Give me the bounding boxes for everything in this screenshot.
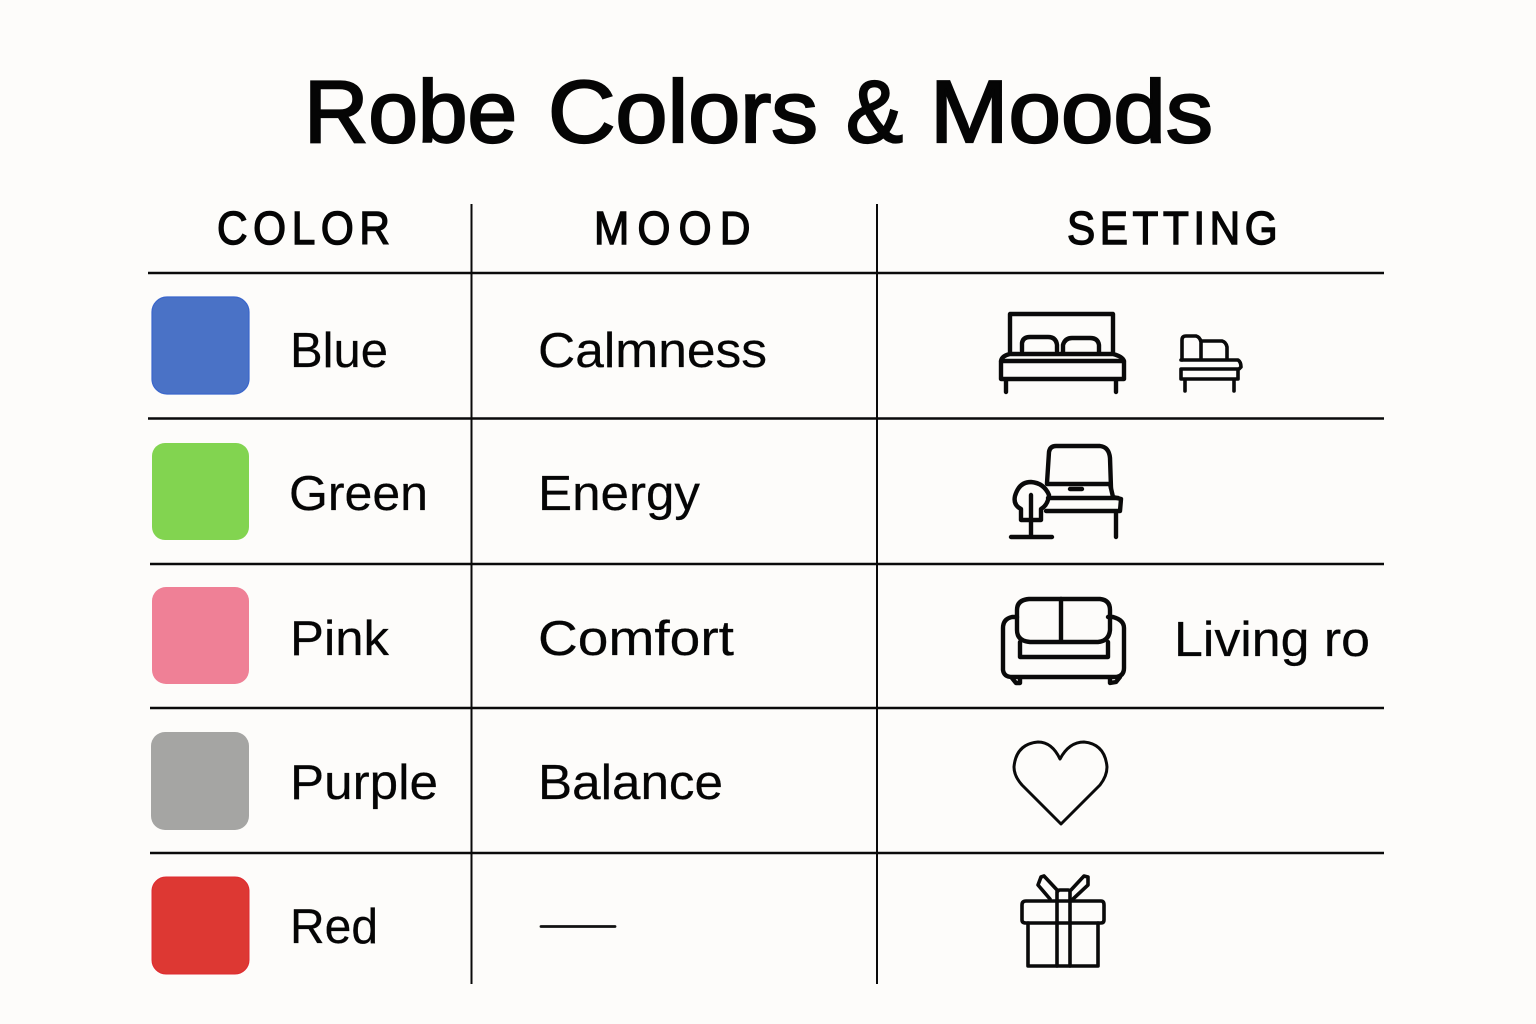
label: Red: Red <box>290 900 378 954</box>
title: Moods <box>930 62 1213 161</box>
label: Purple: Purple <box>290 756 438 810</box>
title <box>304 62 1213 161</box>
column header: setting: SETTING <box>1067 203 1278 254</box>
swatch: blue <box>152 297 249 394</box>
label: Green: Green <box>289 467 428 521</box>
title: Colors <box>548 62 818 161</box>
icon: heart <box>1014 742 1107 824</box>
swatch: red <box>152 877 249 974</box>
column header: color: COLOR <box>217 203 390 254</box>
icon: small sofa <box>1181 336 1241 391</box>
column header: mood: MOOD <box>594 203 750 254</box>
icon: desk with laptop and chair <box>1011 446 1121 537</box>
mood: dash <box>541 925 615 928</box>
icon: gift <box>1022 876 1104 966</box>
mood: Balance: Balance <box>538 756 723 810</box>
title: Robe <box>304 62 517 161</box>
mood: Calmness: Calmness <box>538 324 767 378</box>
setting label: Living ro: Living ro <box>1174 613 1370 667</box>
mood: Energy: Energy <box>538 467 701 521</box>
label: Blue: Blue <box>290 324 388 378</box>
icon: sofa <box>1003 599 1124 683</box>
mood: Comfort: Comfort <box>538 612 734 666</box>
icon: bed <box>1001 314 1124 392</box>
swatch: pink <box>152 587 249 684</box>
label: Pink: Pink <box>290 612 390 666</box>
title: & <box>846 62 903 161</box>
swatch: gray <box>151 732 249 830</box>
swatch: green <box>152 443 249 540</box>
